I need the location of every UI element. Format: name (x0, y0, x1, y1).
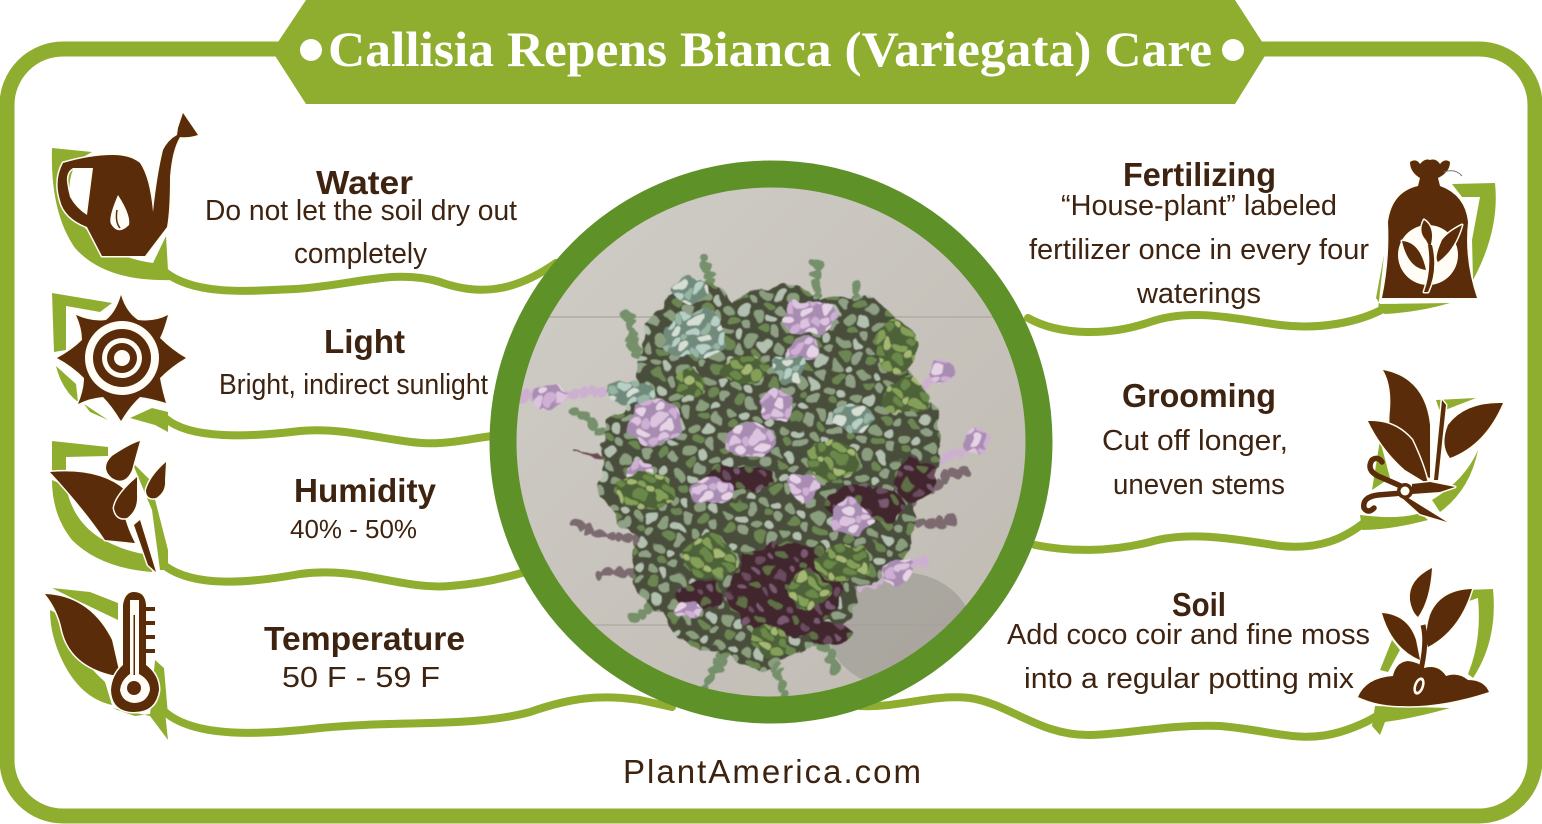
text: soil: into a regular potting mix (1024, 663, 1355, 695)
connector swoosh: light (165, 418, 492, 443)
text: temperature: 50 F - 59 F (282, 662, 440, 694)
panel: grooming (1035, 370, 1503, 550)
heading: temperature: Temperature (264, 620, 465, 657)
panel: fertilizing (1028, 156, 1496, 332)
title banner (272, 0, 1268, 104)
text: water: Do not let the soil dry out (205, 195, 517, 227)
panel: water (52, 113, 556, 291)
text: fertilizing: “House-plant” labeled (1061, 190, 1337, 222)
text: fertilizing (1029, 190, 1369, 310)
text: grooming: uneven stems (1113, 469, 1285, 501)
text: grooming (1102, 425, 1288, 501)
connector swoosh: humidity (165, 566, 525, 586)
icon: leaf and droplets (50, 441, 168, 572)
heading: water: Water (316, 164, 413, 201)
plant photo in ring (500, 170, 1040, 710)
icon: seedling in soil (1358, 568, 1494, 735)
panel: humidity (50, 441, 525, 586)
connector swoosh: grooming (1035, 522, 1365, 550)
text: grooming: Cut off longer, (1102, 425, 1288, 457)
text: light: Bright, indirect sunlight (219, 369, 488, 401)
text: soil: Add coco coir and fine moss (1007, 619, 1370, 651)
panel: temperature (45, 588, 672, 740)
text: soil (1007, 619, 1370, 695)
icon: fertilizer bag (1376, 160, 1496, 314)
text: fertilizing: fertilizer once in every four (1029, 234, 1369, 266)
icon: leaf and thermometer (45, 588, 168, 740)
connector swoosh: soil (860, 697, 1382, 737)
icon: sun (52, 293, 186, 432)
plant foliage (522, 255, 986, 695)
panel: light (52, 293, 492, 443)
text: fertilizing: waterings (1136, 278, 1261, 310)
connector swoosh: temperature (165, 697, 672, 733)
heading: fertilizing: Fertilizing (1123, 156, 1276, 193)
heading: humidity: Humidity (294, 472, 437, 509)
text: water: completely (294, 238, 427, 270)
footer website: PlantAmerica.com (623, 753, 921, 790)
heading: soil: Soil (1172, 586, 1226, 623)
connector swoosh: water (165, 263, 556, 291)
text: water (205, 195, 517, 270)
heading: light: Light (324, 323, 405, 360)
heading: grooming: Grooming (1122, 377, 1276, 414)
text: humidity: 40% - 50% (290, 514, 417, 544)
panel: soil (860, 568, 1494, 737)
icon: leaves and pruning shears (1360, 370, 1503, 530)
connector swoosh: fertilizing (1028, 308, 1385, 332)
icon: watering can (52, 113, 198, 280)
title: Callisia Repens Bianca (Variegata) Care (328, 21, 1212, 77)
shadow (830, 573, 966, 680)
